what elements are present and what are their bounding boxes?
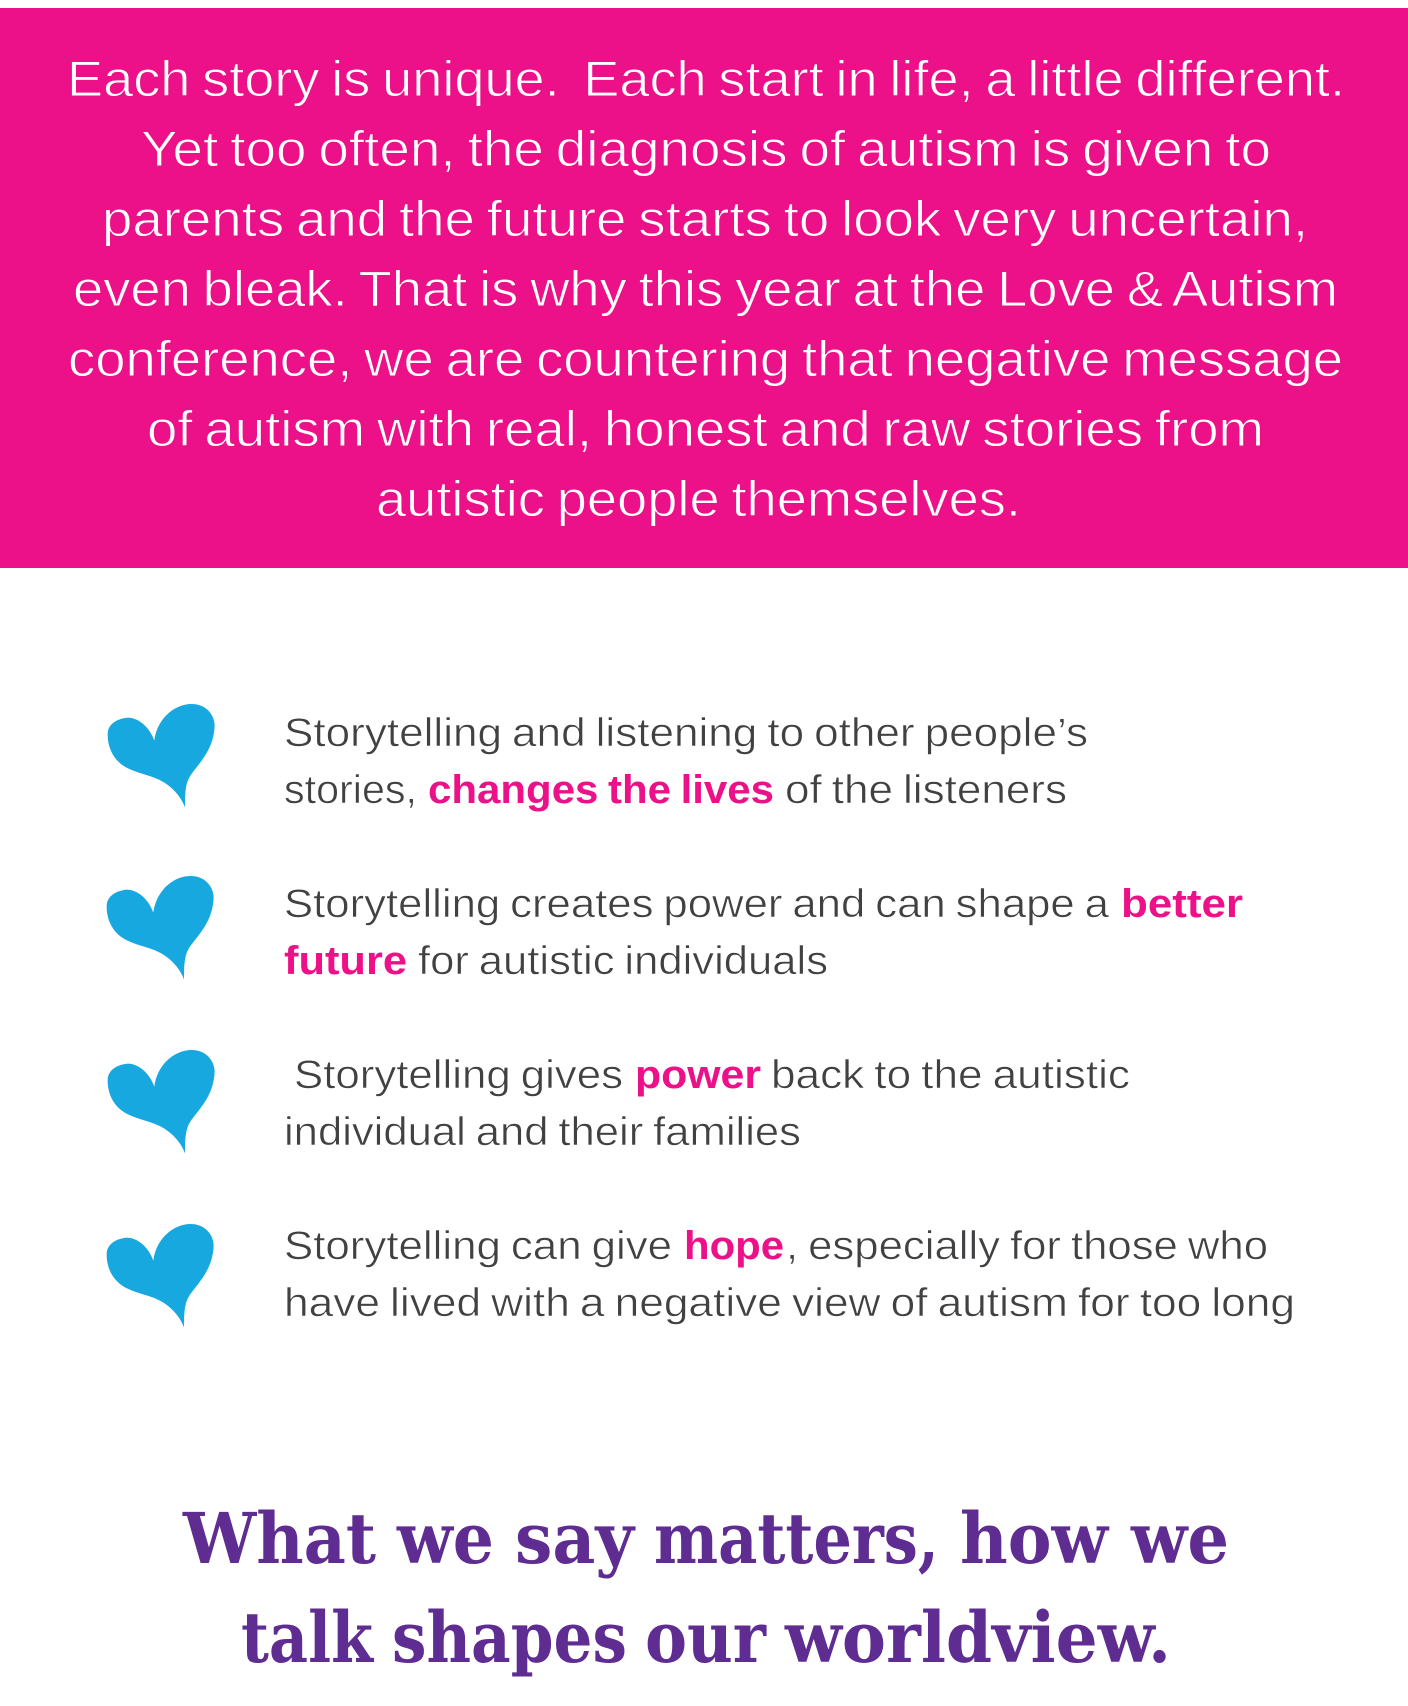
text: changes the lives: Storytelling and listening to other people’s <box>284 711 1088 755</box>
closing heading: matters, <box>654 1497 939 1580</box>
closing heading: our <box>645 1596 767 1679</box>
list item 4 <box>107 1224 1295 1327</box>
closing heading: we <box>396 1497 494 1580</box>
icon: blue heart <box>108 1050 215 1153</box>
text: power: power <box>635 1053 761 1097</box>
text: power <box>284 1053 1130 1154</box>
closing heading: worldview. <box>784 1596 1171 1679</box>
icon: blue heart <box>107 876 214 979</box>
closing heading: talk <box>241 1596 374 1679</box>
text: power: Storytelling gives <box>294 1053 623 1097</box>
text: better future: for autistic individuals <box>418 939 828 983</box>
text: hope: hope <box>684 1224 784 1268</box>
text: power: individual and their families <box>284 1110 801 1154</box>
panel: pink intro banner <box>0 8 1408 568</box>
text: changes the lives: changes the lives <box>428 768 774 812</box>
text: better future: Storytelling creates power and can shape a <box>284 882 1110 926</box>
list item 2 <box>107 876 1243 983</box>
text: better future: better <box>1121 882 1243 926</box>
intro text: of autism with real, honest and raw stories from <box>147 401 1264 457</box>
text: power: back to the autistic <box>771 1053 1130 1097</box>
text: better future <box>284 882 1243 983</box>
intro text: parents and the future starts to look very uncertain, <box>102 191 1308 247</box>
closing heading: say <box>515 1497 636 1580</box>
text: changes the lives <box>284 711 1088 812</box>
text: better future: future <box>284 939 407 983</box>
intro text: Yet too often, the diagnosis of autism is given to <box>141 121 1271 177</box>
icon: blue heart <box>107 1224 214 1327</box>
intro text: autistic people themselves. <box>376 471 1021 527</box>
text: hope: have lived with a negative view of autism for too long <box>284 1281 1295 1325</box>
text: hope <box>284 1224 1295 1325</box>
list item 1 <box>108 704 1088 812</box>
list item 3 <box>108 1050 1130 1154</box>
closing heading <box>182 1497 1229 1679</box>
intro text: Each story is unique. Each start in life, a little different. <box>67 51 1345 107</box>
icon: blue heart <box>108 704 215 807</box>
intro text: conference, we are countering that negative message <box>68 331 1343 387</box>
closing heading: how <box>960 1497 1110 1580</box>
intro text: even bleak. That is why this year at the Love & Autism <box>73 261 1338 317</box>
text: hope: , especially for those who <box>786 1224 1268 1268</box>
intro text <box>67 51 1345 527</box>
closing heading: What <box>182 1497 376 1580</box>
text: changes the lives: of the listeners <box>785 768 1067 812</box>
closing heading: shapes <box>392 1596 627 1679</box>
closing heading: we <box>1130 1497 1229 1580</box>
text: hope: Storytelling can give <box>284 1224 672 1268</box>
text: changes the lives: stories, <box>284 768 417 812</box>
